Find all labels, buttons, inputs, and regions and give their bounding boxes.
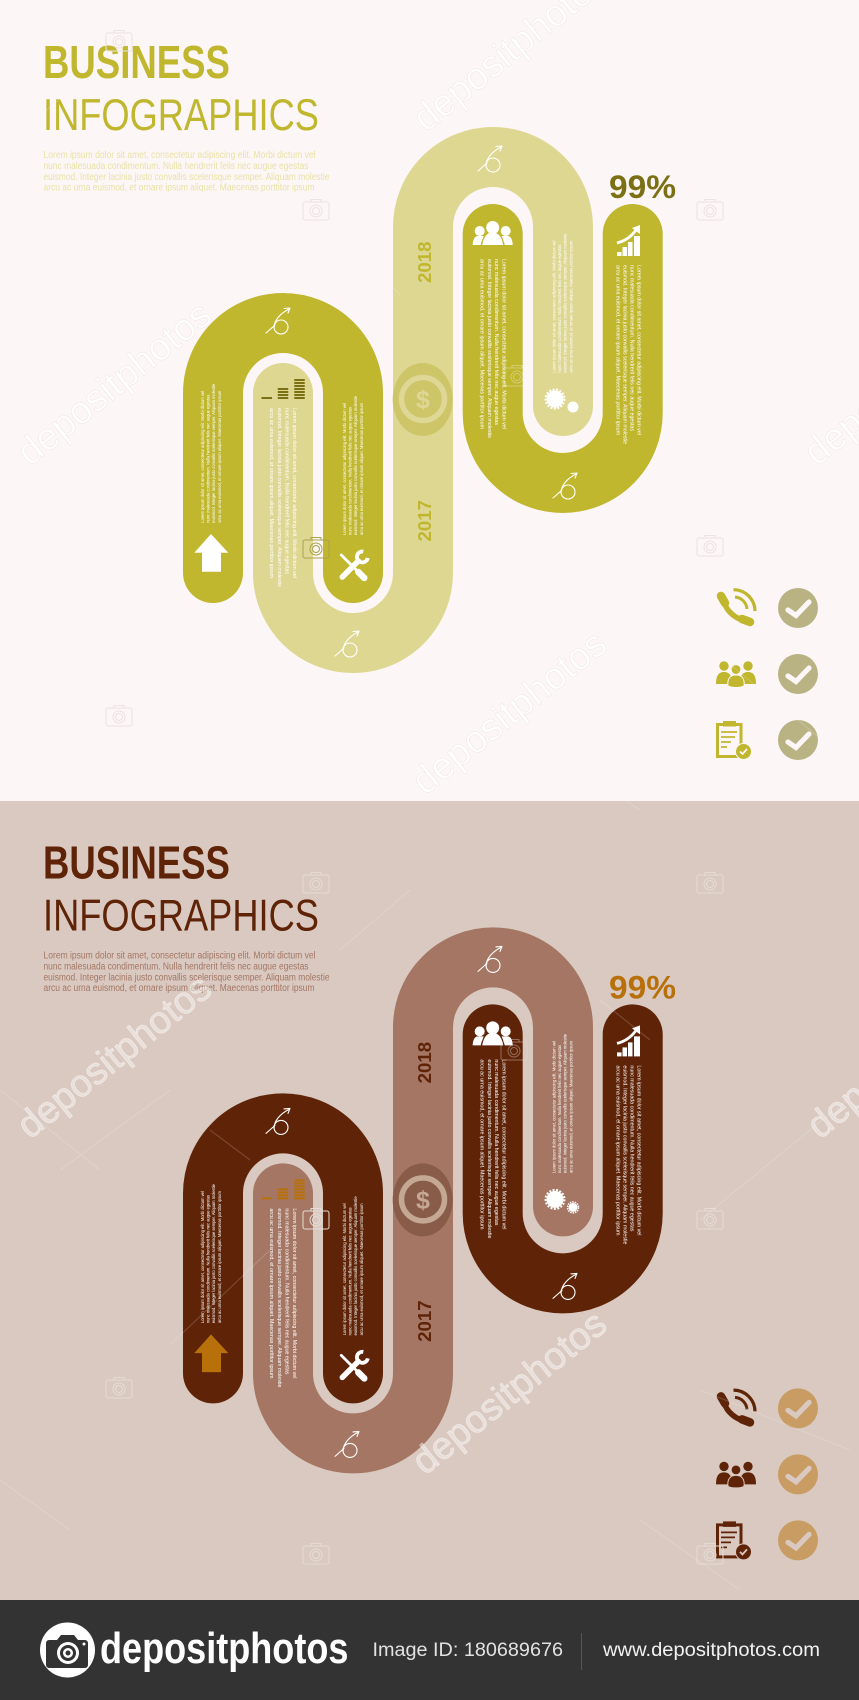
text column: left arch left leg: Lorem ipsum dolor sit amet, consectetur adipiscing elit. Morbi dictum vel [200,1191,205,1323]
year 2018: 2018 [414,1042,435,1083]
text column: left arch left leg: nunc malesuada condimentum. Nulla hendrerit felis nec augue egestas [206,394,211,523]
year 2017: 2017 [414,1300,435,1342]
title: BUSINESS [43,36,230,88]
icon: swirl arrow bottom [335,1431,359,1457]
light winding path [283,957,563,1443]
dollar badge [393,1163,453,1236]
icon: clipboard [718,1521,752,1560]
icon: growth chart [617,225,640,256]
text column: right arch right leg: Lorem ipsum dolor sit amet, consectetur adipiscing elit. Morbi dictum vel [636,1065,642,1235]
icon: phone [721,1390,755,1422]
image id: Image ID: 180689676 [372,1640,563,1661]
watermark layer: olive panel: depositphotos [9,294,220,474]
text column: light bottom leg [268,1208,297,1388]
intro paragraph: arcu ac urna euismod, et ornare ipsum aliquet. Maecenas porttitor ipsum [44,983,314,994]
text column: right arch left leg: nunc malesuada condimentum. Nulla hendrerit felis nec augue egestas [493,259,499,425]
text column: light bottom leg: Lorem ipsum dolor sit amet, consectetur adipiscing elit. Morbi dictum vel [291,1208,297,1378]
icon: team [716,1462,756,1488]
icon: swirl arrow top [478,946,502,972]
intro paragraph [44,150,330,194]
text column: light top leg: euismod. Integer lacinia justo convallis scelerisque semper. Aliquam molestie [563,1034,568,1173]
text column: right arch right leg: euismod. Integer lacinia justo convallis scelerisque semper. Aliquam molestie [622,265,628,445]
text column: light bottom leg: arcu ac urna euismod, et ornare ipsum aliquet. Maecenas porttitor ipsum [268,408,274,578]
panel: background taupe [0,801,859,1601]
text column: light top leg [552,233,573,373]
text column: left arch right leg: arcu ac urna euismod, et ornare ipsum aliquet. Maecenas porttitor ipsum [359,403,364,535]
icon: people [473,221,513,245]
dollar badge: $ [416,386,430,414]
dollar badge: $ [416,1186,430,1214]
text column: light top leg: euismod. Integer lacinia justo convallis scelerisque semper. Aliquam molestie [563,233,568,373]
icon: swirl arrow top [478,146,502,172]
icon: team [716,661,756,688]
icon: people [473,1021,513,1045]
light winding path [283,157,563,643]
text column: left arch right leg [342,1196,364,1335]
logo wordmark: depositphotos [100,1624,348,1673]
percent stat: 99% [609,969,676,1005]
text column: right arch right leg: nunc malesuada condimentum. Nulla hendrerit felis nec augue egestas [628,1065,634,1231]
text column: right arch left leg: arcu ac urna euismod, et ornare ipsum aliquet. Maecenas porttitor ipsum [479,1059,485,1229]
text column: left arch right leg: arcu ac urna euismod, et ornare ipsum aliquet. Maecenas porttitor ipsum [359,1203,364,1335]
text column: right arch right leg: nunc malesuada condimentum. Nulla hendrerit felis nec augue egestas [628,265,634,431]
text column: light top leg: arcu ac urna euismod, et ornare ipsum aliquet. Maecenas porttitor ipsum [568,240,573,373]
dollar badge [393,363,453,436]
check badge 1 [778,588,818,628]
watermark cameras: taupe panel [106,872,723,1564]
text column: left arch right leg: Lorem ipsum dolor sit amet, consectetur adipiscing elit. Morbi dictum vel [342,1203,347,1335]
intro paragraph: euismod. Integer lacinia justo convallis scelerisque semper. Aliquam molestie [44,972,330,983]
text column: left arch right leg: nunc malesuada condimentum. Nulla hendrerit felis nec augue egestas [348,1207,353,1335]
text column: right arch left leg: Lorem ipsum dolor sit amet, consectetur adipiscing elit. Morbi dictum vel [500,259,506,429]
year 2018: 2018 [414,242,435,283]
text column: light top leg: nunc malesuada condimentum. Nulla hendrerit felis nec augue egestas [557,1044,562,1173]
text column: right arch left leg [479,259,506,439]
site url: www.depositphotos.com [602,1640,820,1661]
text column: left arch left leg: arcu ac urna euismod, et ornare ipsum aliquet. Maecenas porttitor ipsum [217,1191,222,1323]
text column: right arch right leg [614,265,642,445]
text column: right arch right leg: arcu ac urna euismod, et ornare ipsum aliquet. Maecenas porttitor ipsum [614,265,620,435]
text column: light bottom leg: arcu ac urna euismod, et ornare ipsum aliquet. Maecenas porttitor ipsum [268,1208,274,1378]
text column: left arch right leg: euismod. Integer lacinia justo convallis scelerisque semper. Aliquam molestie [353,1196,358,1335]
watermark layer: taupe panel: depositphotos [404,1303,615,1483]
dark arch left [213,1123,353,1373]
title [43,36,319,140]
text column: left arch left leg: arcu ac urna euismod, et ornare ipsum aliquet. Maecenas porttitor ipsum [217,391,222,523]
text column: light bottom leg [268,408,297,588]
panel: brown infographic [43,836,818,1560]
watermark layer: olive panel [9,0,859,803]
icon: camera logo [40,1622,95,1678]
text column: right arch right leg: Lorem ipsum dolor sit amet, consectetur adipiscing elit. Morbi dictum vel [636,265,642,435]
text column: light bottom leg: euismod. Integer lacinia justo convallis scelerisque semper. Aliquam molestie [276,408,282,588]
icon: swirl arrow right [553,473,577,499]
intro paragraph: euismod. Integer lacinia justo convallis scelerisque semper. Aliquam molestie [44,172,330,183]
text column: light top leg: Lorem ipsum dolor sit amet, consectetur adipiscing elit. Morbi dictum vel [552,241,556,373]
text column: light bottom leg: nunc malesuada condimentum. Nulla hendrerit felis nec augue egestas [283,408,289,574]
dark arch left [213,323,353,573]
text column: light top leg: nunc malesuada condimentum. Nulla hendrerit felis nec augue egestas [557,244,562,373]
watermark layer: taupe panel [9,967,859,1483]
text column: right arch left leg: euismod. Integer lacinia justo convallis scelerisque semper. Aliquam molestie [486,1059,492,1239]
year 2017: 2017 [414,500,435,542]
title: INFOGRAPHICS [43,890,319,940]
icon: swirl arrow left [266,308,290,334]
text column: right arch left leg: nunc malesuada condimentum. Nulla hendrerit felis nec augue egestas [493,1059,499,1225]
text column: left arch left leg: euismod. Integer lacinia justo convallis scelerisque semper. Aliquam molestie [211,383,216,523]
icon: swirl arrow right [553,1273,577,1299]
icon: clipboard [718,721,752,760]
watermark layer: taupe panel: depositphotos [9,967,220,1147]
dark arch right [493,234,633,483]
percent stat: 99% [609,169,676,205]
icon: stacked bars [267,379,300,399]
intro paragraph: nunc malesuada condimentum. Nulla hendrerit felis nec augue egestas [44,961,309,972]
text column: left arch left leg: nunc malesuada condimentum. Nulla hendrerit felis nec augue egestas [206,1194,211,1323]
icon: swirl arrow bottom [335,631,359,657]
text column: right arch right leg: arcu ac urna euismod, et ornare ipsum aliquet. Maecenas porttitor ipsum [614,1065,620,1235]
check badge 3 [778,1520,818,1560]
text column: right arch left leg: arcu ac urna euismod, et ornare ipsum aliquet. Maecenas porttitor ipsum [479,259,485,429]
text column: left arch left leg: euismod. Integer lacinia justo convallis scelerisque semper. Aliquam molestie [211,1184,216,1323]
text column: left arch right leg: euismod. Integer lacinia justo convallis scelerisque semper. Aliquam molestie [353,396,358,535]
text column: right arch right leg: euismod. Integer lacinia justo convallis scelerisque semper. Aliquam molestie [622,1065,628,1245]
check badge 2 [778,1454,818,1494]
text column: light top leg: Lorem ipsum dolor sit amet, consectetur adipiscing elit. Morbi dictum vel [552,1041,556,1173]
title [43,836,319,940]
icon: up arrow [194,1334,228,1372]
text column: left arch left leg [200,383,222,523]
icon: growth chart [617,1025,640,1056]
footer bar [0,1600,859,1700]
intro paragraph: arcu ac urna euismod, et ornare ipsum aliquet. Maecenas porttitor ipsum [44,182,314,194]
check badge 3 [778,720,818,760]
icon: swirl arrow left [266,1108,290,1134]
text column: light bottom leg: Lorem ipsum dolor sit amet, consectetur adipiscing elit. Morbi dictum vel [291,408,297,578]
icon: gears [546,1190,578,1213]
text column: left arch left leg: Lorem ipsum dolor sit amet, consectetur adipiscing elit. Morbi dictum vel [200,391,205,523]
text column: light top leg [552,1034,573,1173]
text column: right arch left leg: euismod. Integer lacinia justo convallis scelerisque semper. Aliquam molestie [486,259,492,439]
icon: tools [341,551,368,578]
icon: up arrow [194,534,228,572]
divider [581,1633,582,1670]
dark arch right [493,1034,633,1283]
text column: right arch right leg [614,1065,642,1245]
text column: left arch right leg: Lorem ipsum dolor sit amet, consectetur adipiscing elit. Morbi dictum vel [342,403,347,535]
text column: light top leg: arcu ac urna euismod, et ornare ipsum aliquet. Maecenas porttitor ipsum [568,1041,573,1173]
intro paragraph: Lorem ipsum dolor sit amet, consectetur adipiscing elit. Morbi dictum vel [44,950,316,961]
text column: light bottom leg: euismod. Integer lacinia justo convallis scelerisque semper. Aliquam molestie [276,1208,282,1388]
text column: right arch left leg: Lorem ipsum dolor sit amet, consectetur adipiscing elit. Morbi dictum vel [500,1059,506,1229]
title: BUSINESS [43,836,230,888]
watermark layer: olive panel: depositphotos [404,623,615,803]
intro paragraph: Lorem ipsum dolor sit amet, consectetur adipiscing elit. Morbi dictum vel [44,150,316,161]
panel: olive infographic [43,36,818,760]
icon: phone [721,590,755,622]
text column: light bottom leg: nunc malesuada condimentum. Nulla hendrerit felis nec augue egestas [283,1208,289,1374]
icon: stacked bars [267,1179,300,1199]
check badge 2 [778,654,818,694]
text column: left arch right leg [342,396,364,535]
panel: background light [0,0,859,801]
text column: left arch right leg: nunc malesuada condimentum. Nulla hendrerit felis nec augue egestas [348,406,353,535]
title: INFOGRAPHICS [43,89,319,140]
text column: right arch left leg [479,1059,506,1239]
check badge 1 [778,1388,818,1428]
icon: tools [341,1352,368,1378]
intro paragraph [44,950,330,994]
intro paragraph: nunc malesuada condimentum. Nulla hendrerit felis nec augue egestas [44,161,309,172]
text column: left arch left leg [200,1184,222,1323]
watermark cameras: olive panel [106,30,723,726]
icon: gears [546,390,578,412]
